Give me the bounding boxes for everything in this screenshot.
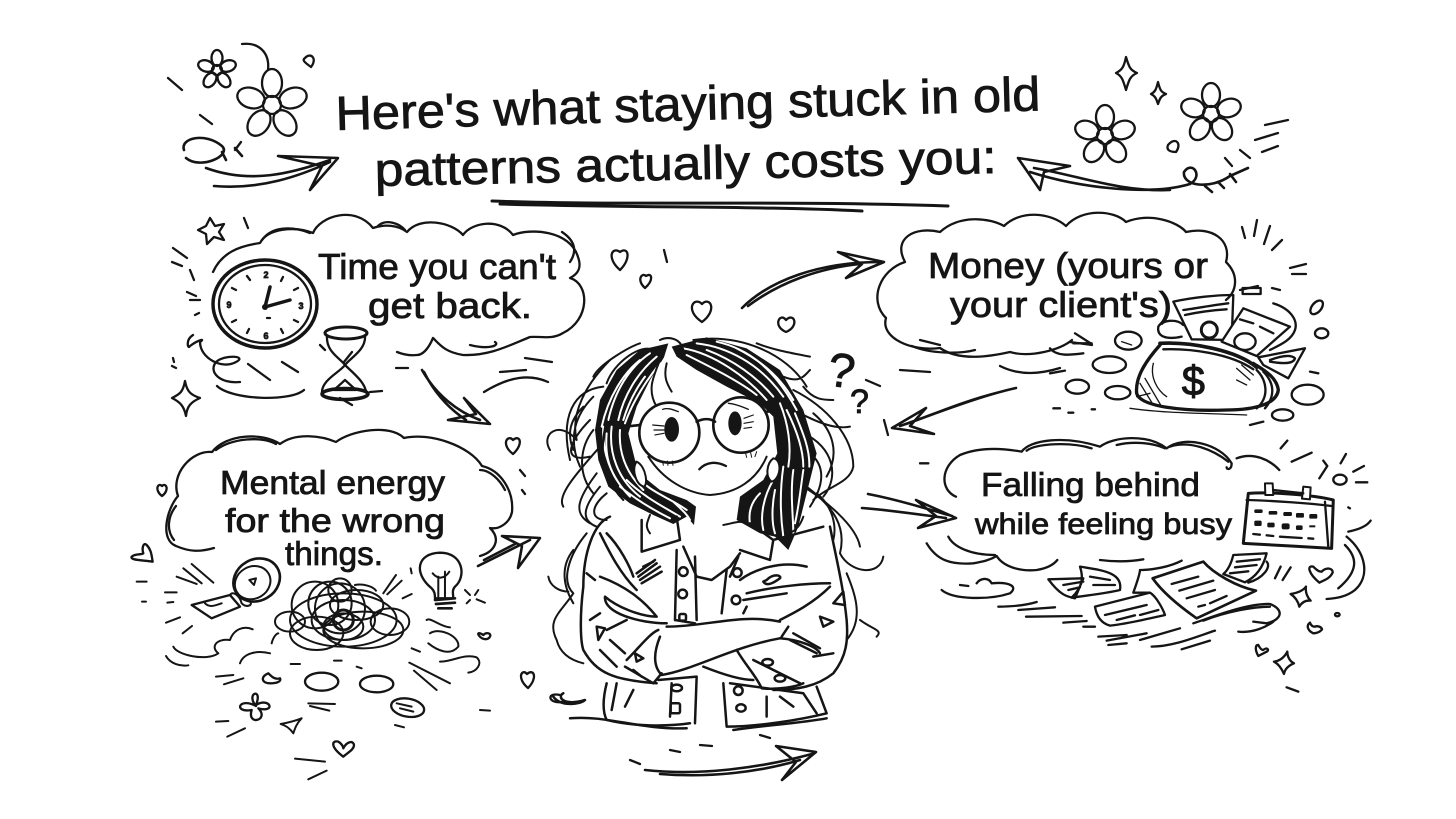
- icon: flower: [240, 694, 270, 720]
- icon: hourglass: [322, 327, 368, 400]
- icon: coins: [305, 673, 426, 719]
- title: patterns actually costs you:: [374, 130, 997, 196]
- icon: clock: 9: [226, 300, 232, 310]
- icon: money bag with coins: $: [1182, 357, 1205, 404]
- thought text: falling behind: [974, 466, 1232, 541]
- character neck and chest: [680, 493, 737, 580]
- icon: clock: 3: [298, 301, 304, 311]
- thought text: mental energy: for the wrong: [225, 502, 445, 539]
- thought text: money: your client's): [950, 284, 1172, 325]
- icons: sparkles and hearts: [1256, 475, 1347, 674]
- icon: clock: [213, 260, 317, 348]
- character loose strands: [593, 338, 850, 533]
- sketch marks: mental energy: [137, 564, 490, 779]
- icon: star: [198, 218, 224, 244]
- character: frustrated woman with arms crossed: [547, 337, 883, 730]
- thought cloud: money: [877, 213, 1235, 357]
- icon: calendar: [1243, 483, 1333, 548]
- thought text: money: [928, 245, 1208, 325]
- panel: money: [877, 213, 1328, 425]
- character left hair mass: [595, 343, 696, 525]
- thought cloud: time: [213, 215, 584, 355]
- thought cloud: mental energy: [166, 430, 512, 556]
- icon: tangled scribble: [275, 578, 409, 650]
- thought cloud: falling behind: [927, 438, 1371, 599]
- icon: light bulb: [420, 553, 485, 608]
- thought text: money: Money (yours or: [928, 245, 1208, 286]
- arrow: mental energy to character: [478, 536, 540, 568]
- title underline: [492, 201, 948, 211]
- icon: top-left flowers: [168, 44, 314, 150]
- character face: [640, 364, 770, 492]
- denim jacket: [553, 517, 847, 730]
- title: Here's what staying stuck in old: [335, 68, 1041, 141]
- icon: sparkle: [172, 381, 200, 416]
- icon: star: [281, 718, 302, 733]
- sketch marks: falling behind: [920, 441, 1367, 692]
- arrow: bottom: [645, 746, 816, 780]
- thought text: mental energy: things.: [285, 535, 383, 572]
- sketch marks: time: [172, 218, 408, 405]
- icon: hearts: [131, 544, 490, 757]
- panel: falling behind: [920, 438, 1371, 692]
- mental energy doodles: [131, 544, 490, 779]
- icon: top-right flowers and sparkles: [1073, 57, 1288, 166]
- cheek marks: [663, 452, 757, 465]
- panel: mental energy: [131, 430, 512, 779]
- icon: scattered papers: [1048, 553, 1268, 626]
- title: [335, 68, 1041, 196]
- character back hair: [547, 360, 883, 663]
- thought text: mental energy: Mental energy: [220, 464, 446, 501]
- glasses: [625, 397, 777, 463]
- thought text: time: get back.: [368, 285, 532, 326]
- thought text: falling behind: while feeling busy: [974, 508, 1232, 541]
- thought text: mental energy: [220, 464, 446, 572]
- thought text: time: Time you can't: [318, 246, 556, 287]
- question marks: ?: [850, 383, 869, 421]
- question marks: ?: [824, 343, 858, 400]
- question marks: [824, 343, 869, 421]
- icon: clock: 2: [263, 270, 269, 280]
- arrow: character to money: [742, 252, 884, 308]
- arrow: time to character: [422, 370, 490, 424]
- panel: time: [172, 215, 584, 416]
- arrow: character to falling behind: [862, 494, 956, 528]
- arrow: top-right pointing to title: [1018, 158, 1248, 192]
- sketch marks: money: [1240, 220, 1306, 290]
- earrings: [634, 458, 779, 487]
- character right hair mass: [672, 337, 817, 550]
- thought text: time: [318, 246, 556, 326]
- arrow: top-left pointing to title: [184, 138, 338, 190]
- floating doodles around character: [157, 250, 940, 764]
- character jaw: [648, 457, 767, 495]
- character hair highlights: [602, 342, 809, 537]
- icon: money bag with coins: [1050, 288, 1328, 425]
- thought text: falling behind: Falling behind: [981, 466, 1200, 503]
- icon: clock: 6: [263, 331, 269, 341]
- icon: stopwatch: [192, 550, 288, 618]
- arrow: money to character: [892, 388, 1016, 434]
- mouth: [699, 463, 726, 469]
- eyes: [653, 403, 753, 442]
